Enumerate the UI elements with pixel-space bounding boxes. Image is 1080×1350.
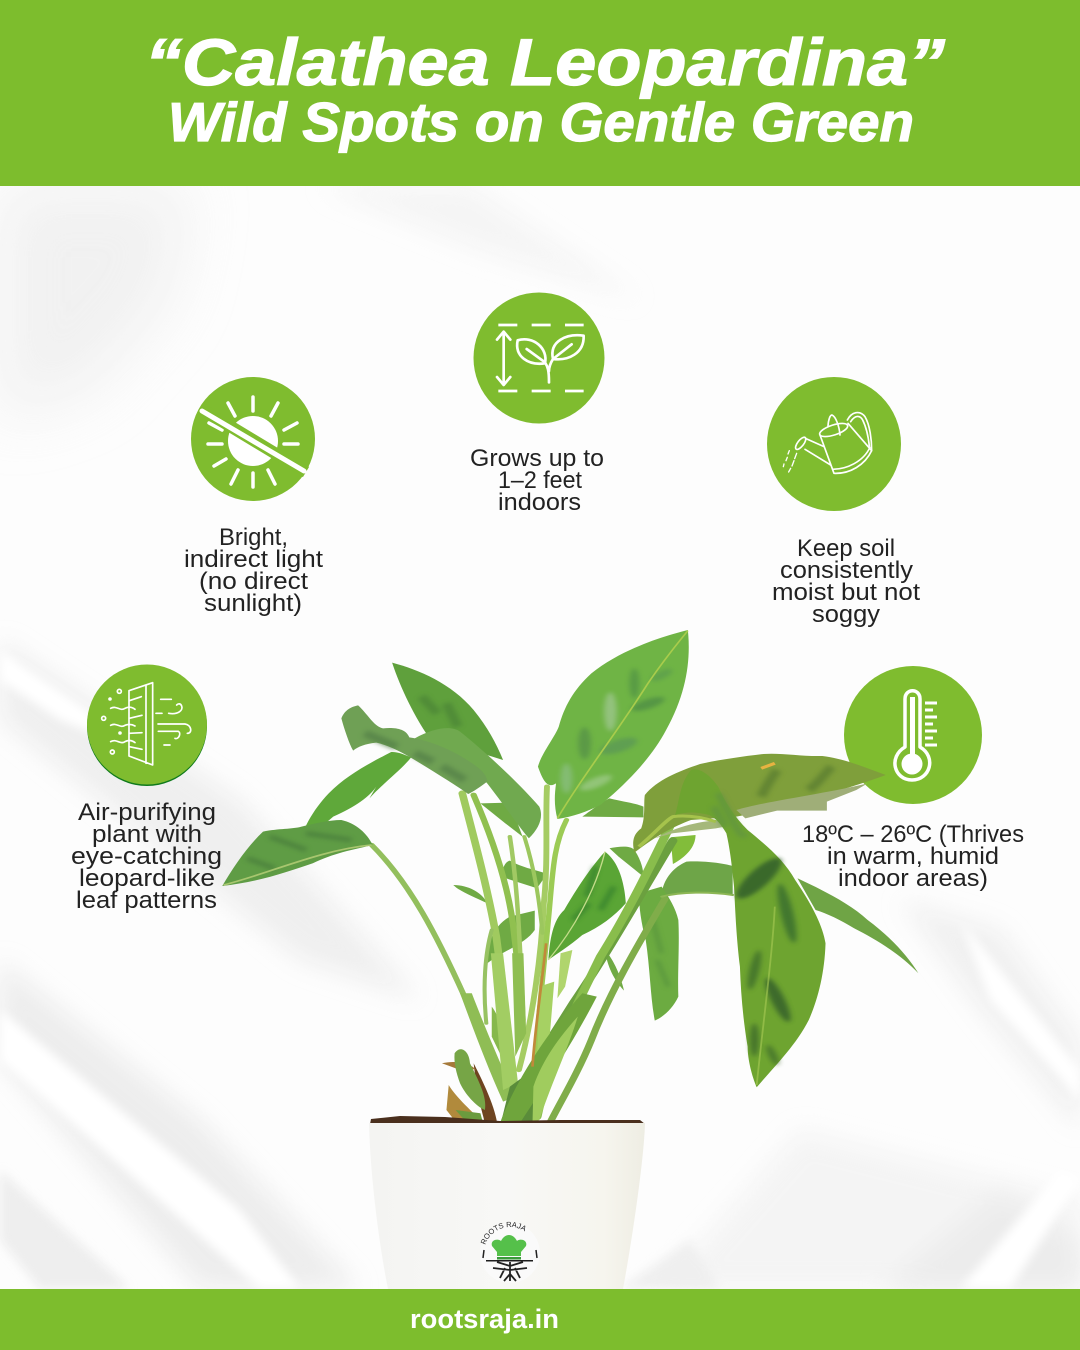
text: watering: soggy [812,601,880,628]
leaf: big hanging [675,769,826,1087]
title line two: Wild Spots on Gentle Green [168,91,914,153]
text: height: indoors [498,489,581,516]
footer banner [0,1289,1080,1350]
icon: plant height [474,292,604,424]
icon: watering can [767,377,901,511]
text: temperature: in warm, humid [827,843,999,870]
text: height [470,445,604,516]
soil [370,1116,645,1124]
text: height: 1–2 feet [498,467,582,494]
text: watering: consistently [780,557,913,584]
text: watering [772,535,920,628]
leaf: right horizontal [633,754,886,853]
text: watering: Keep soil [797,535,895,562]
leaf: tall back left [392,663,503,760]
pot [369,1116,645,1289]
text: air purifying: eye-catching [71,843,222,870]
leaf: far left [222,820,373,886]
text: light: indirect light [184,546,323,573]
text: air purifying [71,799,222,914]
logo sticker [480,1222,538,1282]
text: temperature: indoor areas) [838,865,988,892]
text: air purifying: Air-purifying [78,799,216,826]
logo sticker: ROOTS RAJA [480,1222,526,1244]
text: temperature: 18ºC – 26ºC (Thrives [802,821,1024,848]
plant [222,630,918,1123]
icon: thermometer [844,666,982,804]
text: height: Grows up to [470,445,604,472]
title line one: “Calathea Leopardina” [145,25,945,99]
leaf: lower left [297,752,411,852]
leaf: top right large [538,630,689,819]
text: light: (no direct [199,568,308,595]
header banner [0,0,1080,186]
text: air purifying: leaf patterns [76,887,217,914]
stems [372,787,733,1123]
text: temperature [802,821,1024,892]
text: air purifying: plant with [92,821,202,848]
text: light [184,524,323,617]
website: rootsraja.in [410,1304,559,1334]
leaf: small central dark [548,852,626,960]
leaf: ruffled [341,705,487,794]
text: watering: moist but not [772,579,920,606]
icon: air purifying filter [87,664,207,786]
text: air purifying: leopard-like [79,865,215,892]
back leaves [453,798,918,1021]
text: light: sunlight) [204,590,302,617]
icon: light, sun with slash [191,377,315,501]
leaf: droopy left [415,728,541,838]
base stem cluster [460,943,597,1123]
text: light: Bright, [219,524,288,551]
dry base sprout [442,1049,497,1123]
